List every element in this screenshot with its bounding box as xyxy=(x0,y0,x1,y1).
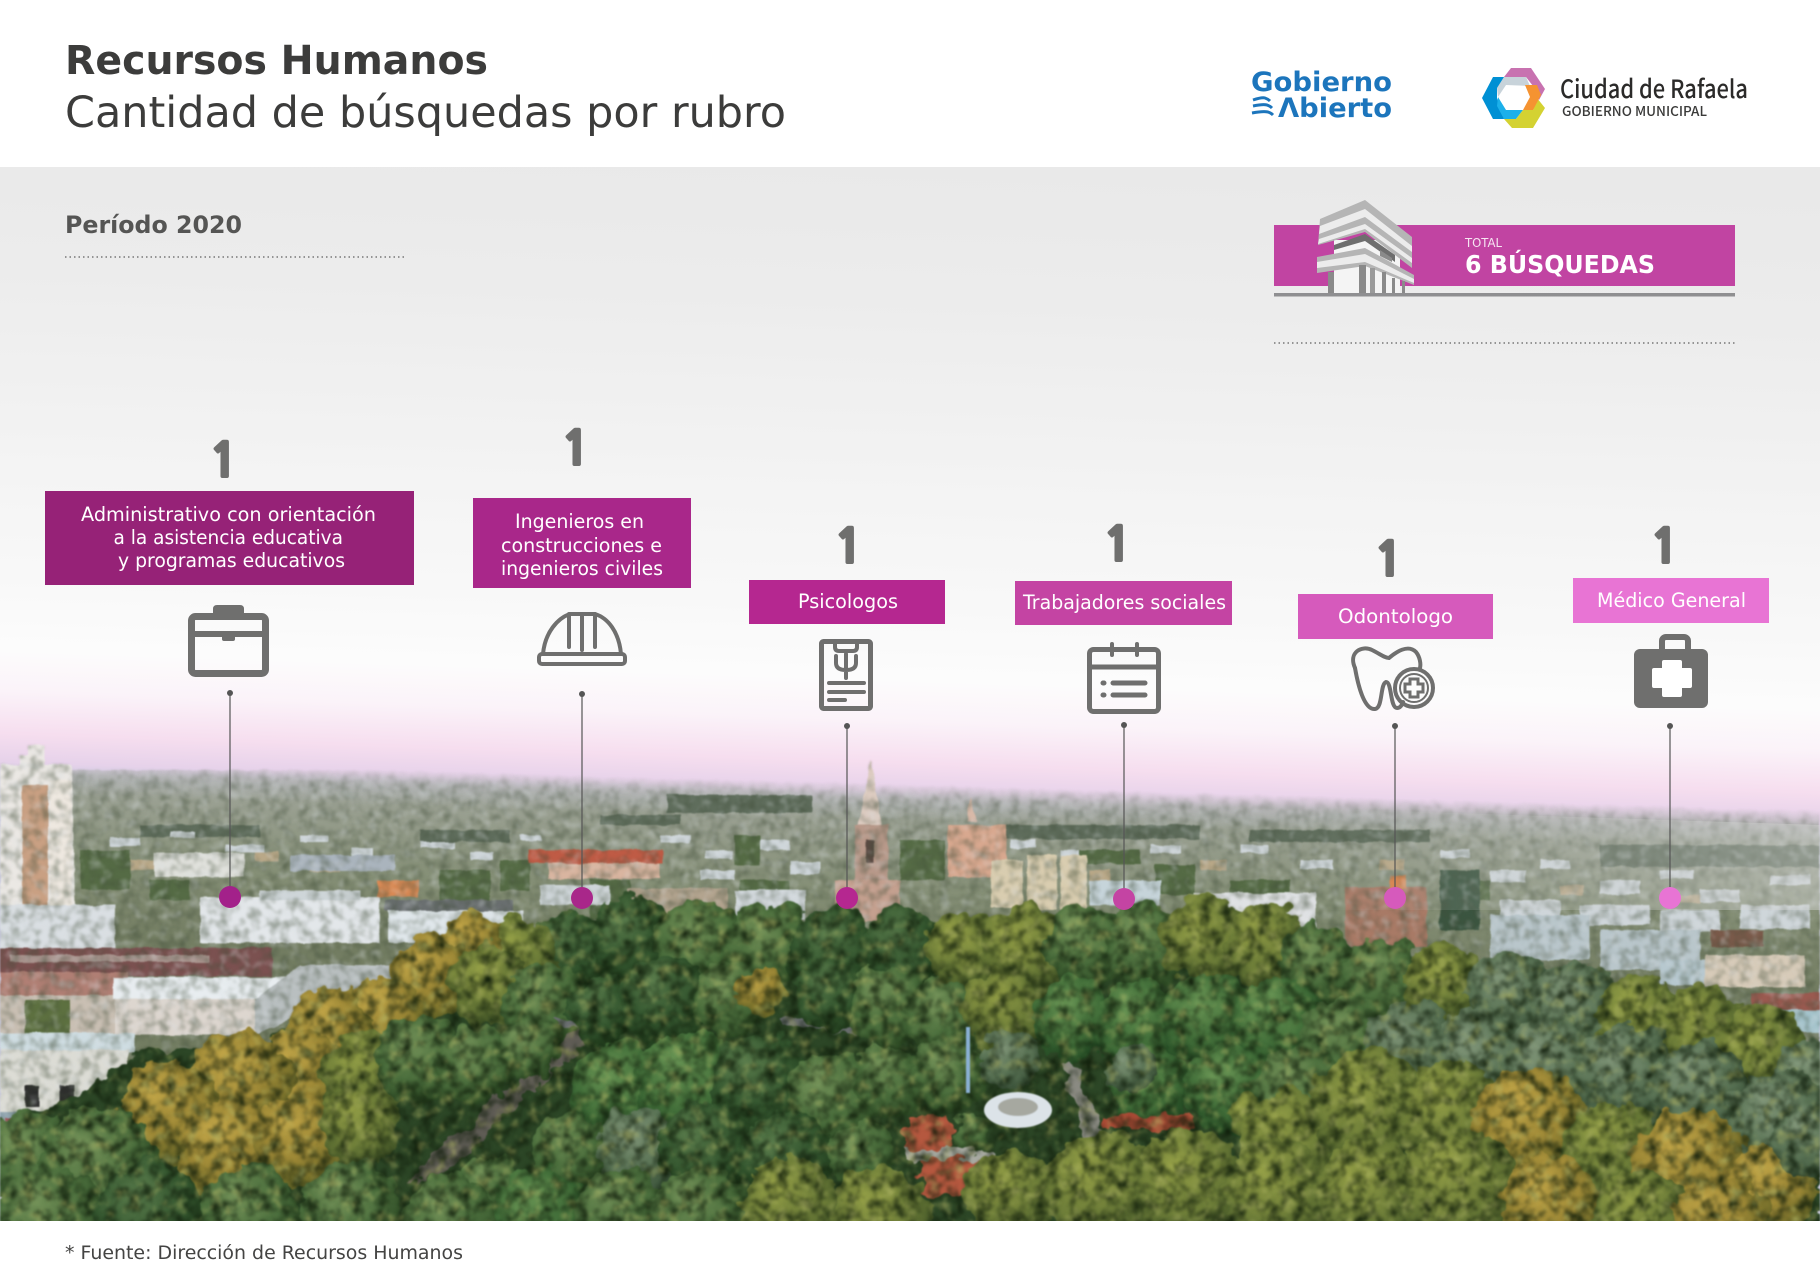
label box: a la asistencia educativa xyxy=(114,526,343,549)
count: 1 xyxy=(835,523,863,570)
total divider xyxy=(1274,342,1735,344)
icon: psychology clipboard xyxy=(822,641,870,708)
total banner: 6 BÚSQUEDAS xyxy=(1465,249,1655,279)
logo: Gobierno Abierto xyxy=(1251,67,1392,124)
icon: building xyxy=(1317,200,1414,293)
connector xyxy=(836,723,858,909)
label box xyxy=(749,580,945,624)
connector xyxy=(219,690,241,908)
city aerial photo illustration xyxy=(0,744,1820,1221)
title: Cantidad de búsquedas por rubro xyxy=(65,88,786,138)
park paths xyxy=(1061,1060,1102,1139)
label box: Médico General xyxy=(1597,589,1746,612)
label box: Administrativo con orientación xyxy=(81,503,376,526)
label box: Psicologos xyxy=(798,590,898,613)
icon: tooth with plus xyxy=(1353,648,1433,709)
label box: Trabajadores sociales xyxy=(1022,591,1226,614)
icon: medical kit xyxy=(1634,637,1708,708)
logo: Ciudad de Rafaela: Ciudad de Rafaela xyxy=(1560,70,1748,106)
connector xyxy=(1659,723,1681,909)
streets under canopy xyxy=(555,1018,865,1031)
label box xyxy=(1298,594,1493,639)
trees mass xyxy=(0,889,1820,1221)
period label: Período 2020 xyxy=(65,211,242,239)
logo: Gobierno Abierto: Gobierno xyxy=(1251,67,1392,98)
icon: hard hat xyxy=(539,614,625,664)
total banner xyxy=(1274,200,1735,296)
label box: y programas educativos xyxy=(118,549,345,572)
logo: Gobierno Abierto: Λbierto xyxy=(1278,93,1392,124)
park gazebo and flagpole xyxy=(966,1027,1052,1128)
label box: Odontologo xyxy=(1338,605,1453,628)
label box xyxy=(45,491,414,585)
label box xyxy=(1573,578,1769,623)
left tower block xyxy=(0,745,75,905)
total banner: TOTAL xyxy=(1464,236,1502,250)
label box: construcciones e xyxy=(501,534,662,557)
logo: Ciudad de Rafaela xyxy=(1482,68,1748,128)
connector xyxy=(1384,723,1406,909)
label box xyxy=(1015,581,1232,625)
count: 1 xyxy=(210,437,238,484)
item: Odontologo xyxy=(1298,536,1493,909)
item: Psicologos xyxy=(749,523,945,909)
item: Médico General xyxy=(1573,523,1769,909)
item: Administrativo xyxy=(45,437,414,908)
icon: hexagon emblem xyxy=(1482,68,1545,128)
count: 1 xyxy=(1651,523,1679,570)
count: 1 xyxy=(1375,536,1403,583)
title xyxy=(65,38,786,138)
left lower buildings xyxy=(0,948,272,976)
source note: * Fuente: Dirección de Recursos Humanos xyxy=(65,1243,463,1264)
label box: Ingenieros en xyxy=(515,510,644,533)
item: Trabajadores sociales xyxy=(1015,521,1232,910)
connector xyxy=(1113,722,1135,910)
logo: Ciudad de Rafaela: GOBIERNO MUNICIPAL xyxy=(1562,100,1707,120)
front canopy xyxy=(0,1108,60,1198)
title: Recursos Humanos xyxy=(65,38,488,84)
count: 1 xyxy=(562,425,590,472)
footer strip xyxy=(0,1221,1820,1286)
label box: ingenieros civiles xyxy=(501,557,663,580)
connector xyxy=(571,691,593,909)
church xyxy=(835,760,900,922)
item: Ingenieros xyxy=(473,425,691,909)
label box xyxy=(473,498,691,588)
icon: calendar list xyxy=(1090,644,1158,712)
icon: briefcase xyxy=(191,605,266,674)
count: 1 xyxy=(1104,521,1132,568)
